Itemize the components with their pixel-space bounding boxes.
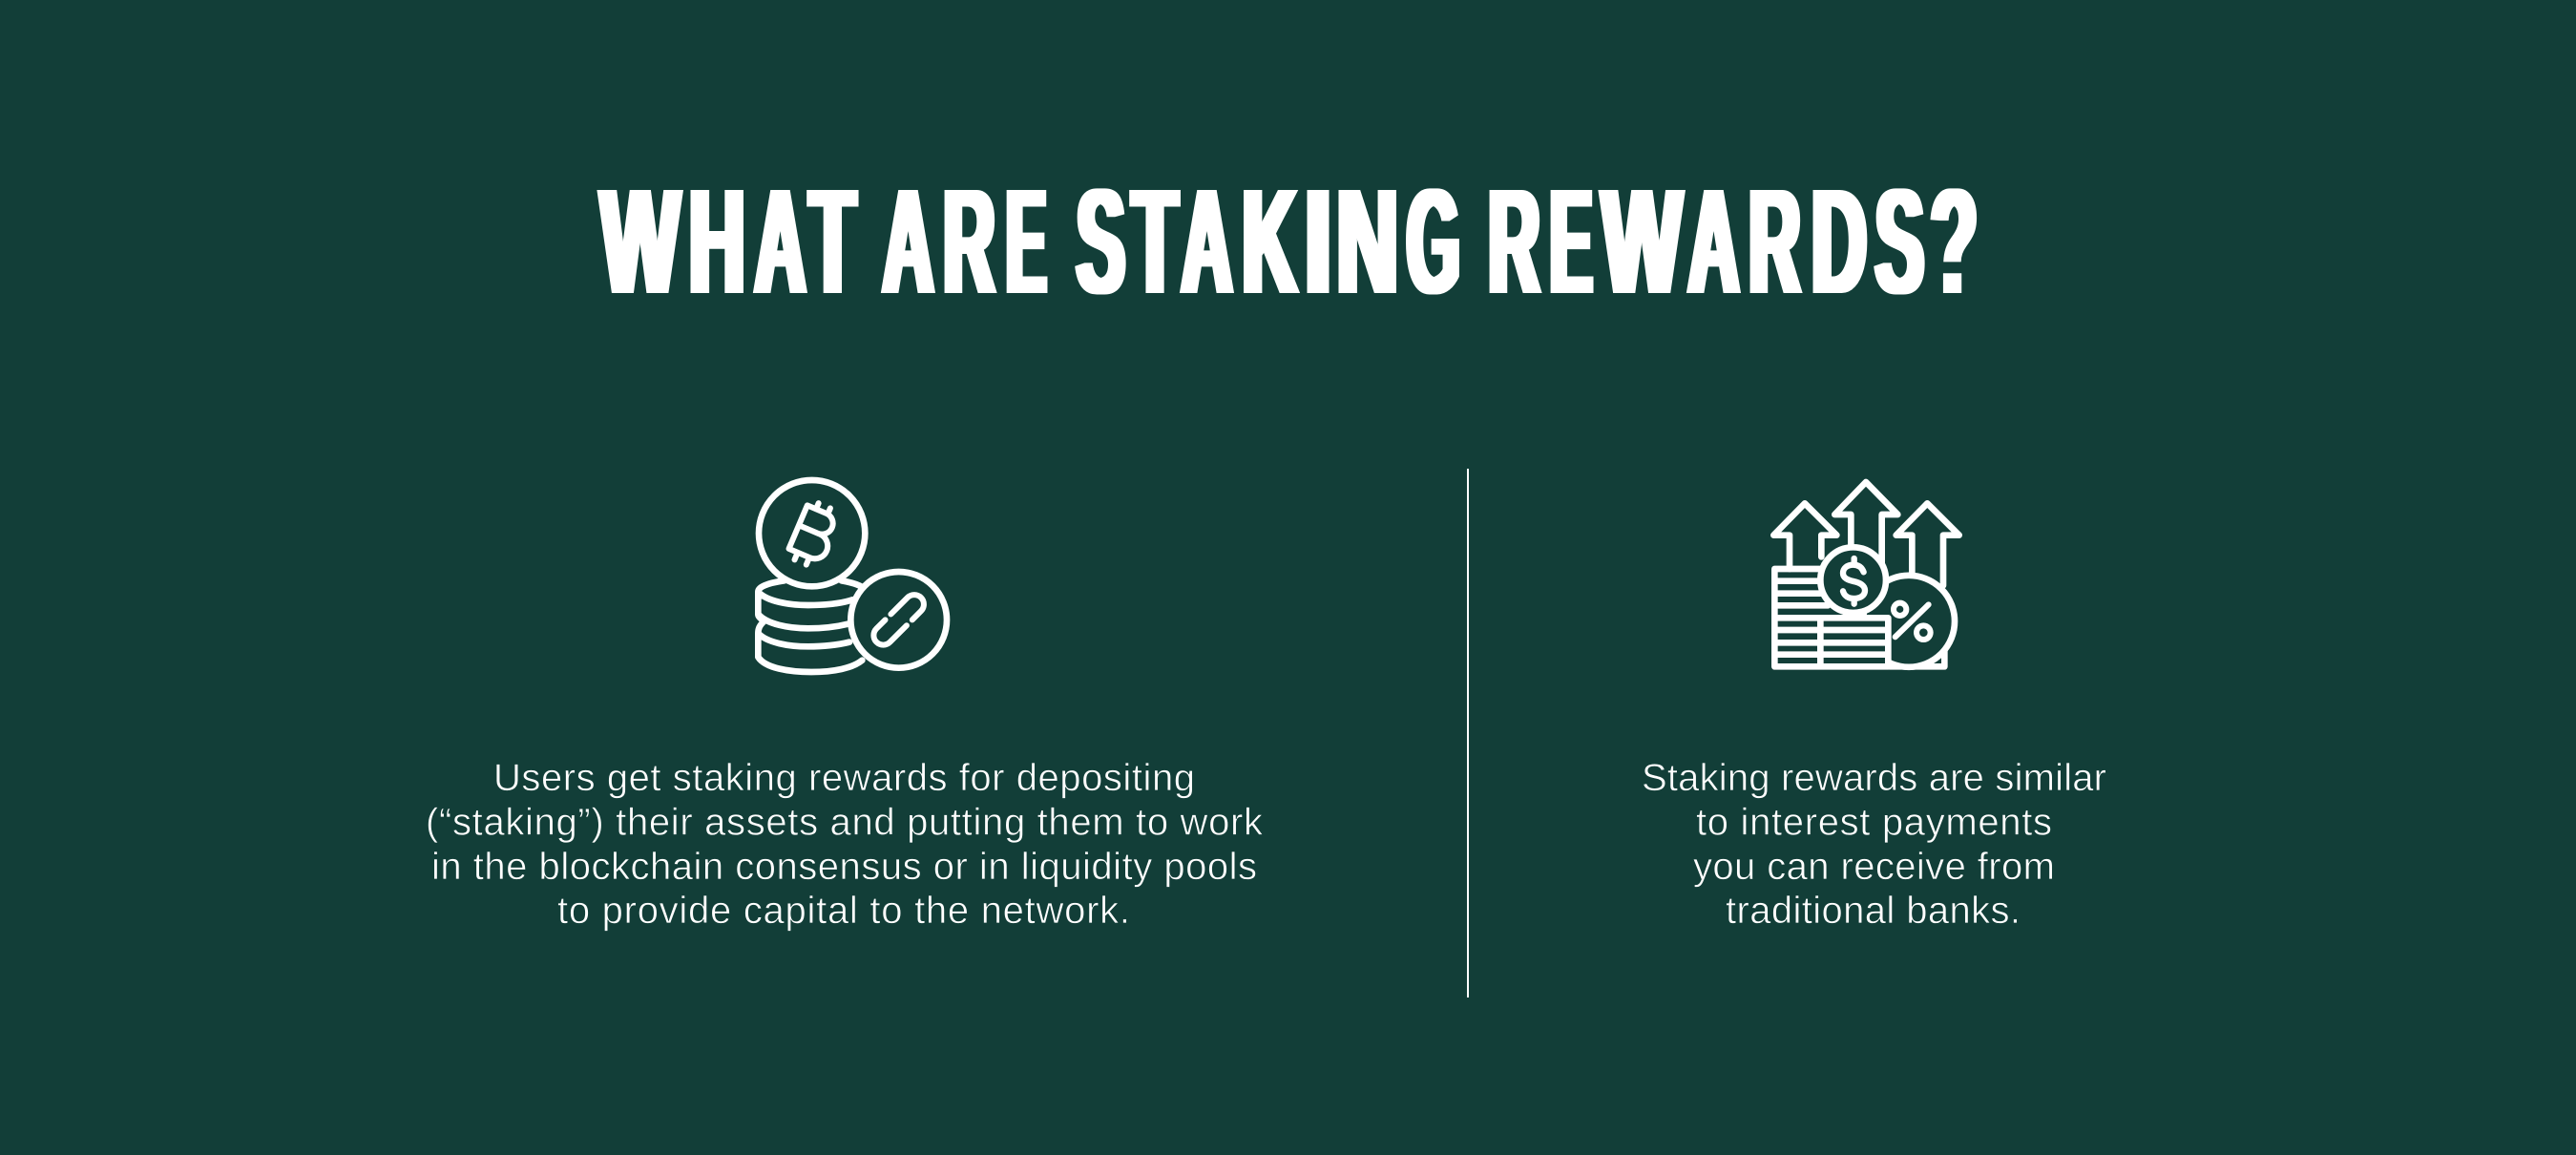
icon part: percent coin [1863,576,1955,667]
title: G [1407,158,1459,326]
title: ? [1931,158,1978,326]
title: I [1304,158,1332,326]
title: A [1182,158,1232,326]
left description: Users get staking rewards for depositing [493,757,1195,799]
title: R [1749,158,1800,326]
title: R [1489,158,1539,326]
title: E [1006,158,1046,326]
right description: Staking rewards are similar [1642,757,2106,799]
title: K [1243,158,1297,326]
title: W [600,158,681,326]
left description: (“staking”) their assets and putting them to work [426,802,1264,844]
title: S [1875,158,1924,326]
title: E [1550,158,1592,326]
icon part: bitcoin coin [759,480,865,586]
divider [1467,469,1469,998]
left description [426,757,1264,932]
left description: in the blockchain consensus or in liquidity pools [431,846,1257,888]
title: N [1336,158,1398,326]
right description [1642,757,2106,932]
title [600,158,1978,326]
icon part: percent sign [1894,603,1931,640]
title: D [1812,158,1867,326]
title: R [944,158,995,326]
icon part: dollar coin [1820,547,1886,613]
right description: you can receive from [1693,846,2055,888]
title: S [1077,158,1125,326]
icon part: bitcoin symbol [785,499,843,570]
title: H [689,158,744,326]
icon part: banknote stacks [1774,569,1888,666]
left description: to provide capital to the network. [557,890,1130,932]
title: T [809,158,855,326]
icon part: coin stack [758,580,862,672]
title: A [755,158,806,326]
icon part: three up arrows [1773,482,1959,585]
title: T [1132,158,1178,326]
title: A [883,158,933,326]
title: A [1688,158,1739,326]
icon part: chain link [869,591,928,649]
right description: traditional banks. [1726,890,2021,932]
icon part: percent coin corner [1890,646,1944,666]
icon: bitcoin coin stack with chain link [758,480,947,672]
icon part: dollar sign [1843,558,1865,604]
icon part: chain coin [850,572,947,668]
title: W [1602,158,1683,326]
icon: growth arrows with money and percent [1773,482,1959,667]
right description: to interest payments [1696,802,2052,844]
